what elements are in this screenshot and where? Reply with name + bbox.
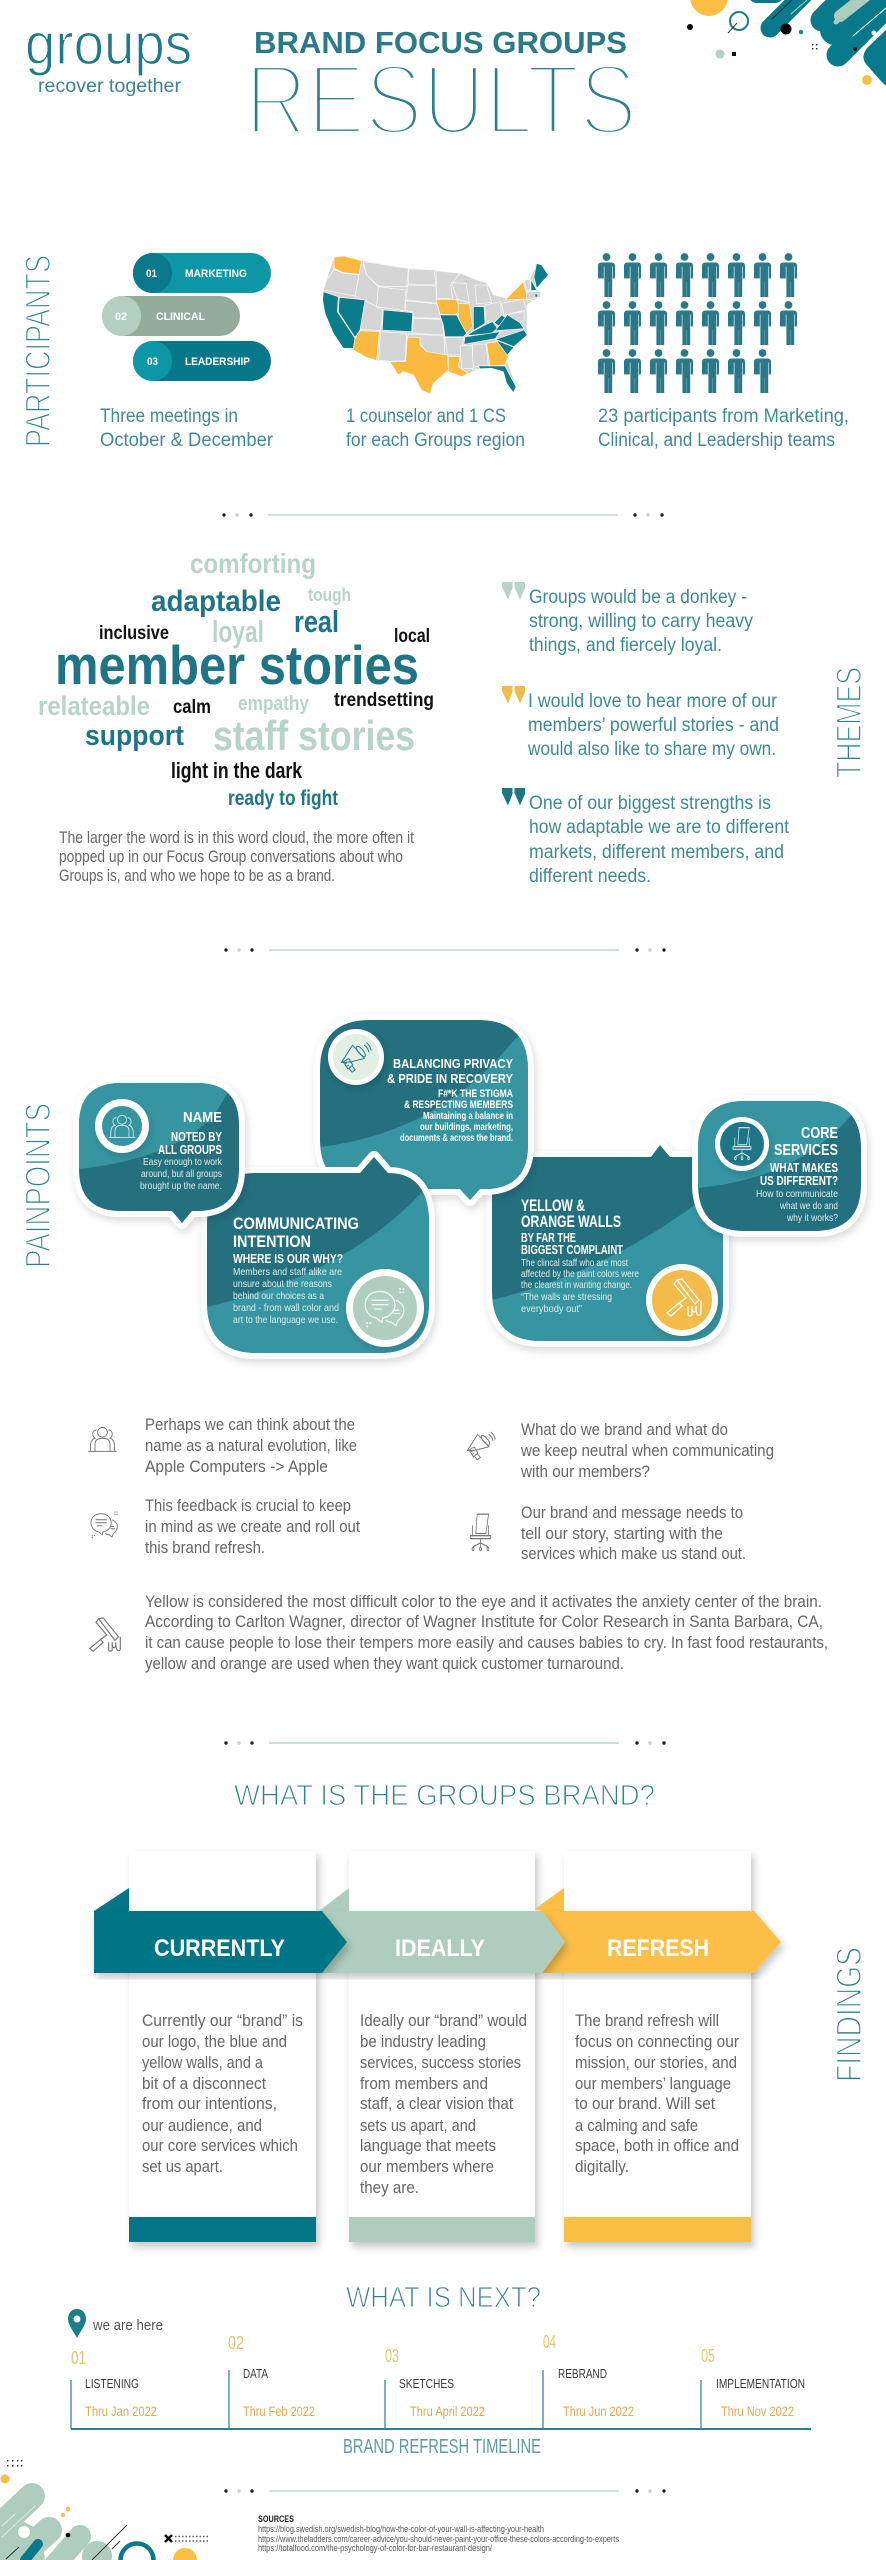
bubble: balancing privacy bbox=[310, 1020, 540, 1210]
bubble: yellow and orange walls: BIGGEST COMPLAINT bbox=[521, 1242, 623, 1257]
step 03: SKETCHES bbox=[399, 2376, 454, 2391]
card: ideally: Ideally our “brand” would bbox=[360, 2012, 527, 2030]
arrow: ideally: IDEALLY bbox=[395, 1935, 485, 1962]
bubble: yellow and orange walls: the clearest in wanting change. bbox=[521, 1279, 632, 1291]
bubble: core services bbox=[690, 1090, 870, 1231]
bubble: core services: why it works? bbox=[786, 1212, 838, 1224]
word cloud: comforting bbox=[190, 548, 316, 579]
text: three meetings bbox=[100, 406, 274, 451]
icon: chat badge bbox=[346, 1269, 424, 1347]
icon: megaphone badge bbox=[328, 1029, 384, 1085]
bubble: communicating intention: behind our choices as a bbox=[233, 1290, 324, 1302]
bubble: communicating intention: WHERE IS OUR WHY? bbox=[233, 1251, 343, 1266]
text: brand refresh timeline: BRAND REFRESH TIMELINE bbox=[343, 2436, 541, 2458]
step 03 bbox=[385, 2346, 485, 2419]
text: word cloud note bbox=[59, 828, 414, 885]
bubble: yellow and orange walls: BY FAR THE bbox=[521, 1230, 576, 1245]
word cloud: staff stories bbox=[213, 712, 415, 759]
card: refresh: The brand refresh will bbox=[575, 2012, 719, 2030]
pill: leadership bbox=[133, 341, 271, 381]
pill: leadership: 03 bbox=[147, 356, 158, 368]
icon: location pin and we are here: we are here bbox=[92, 2317, 163, 2334]
section label: participants: PARTICIPANTS bbox=[19, 255, 58, 447]
quote 3: how adaptable we are to different bbox=[529, 817, 790, 838]
bubble: communicating intention: Members and staff alike are bbox=[233, 1266, 342, 1278]
step 04: Thru Jun 2022 bbox=[563, 2403, 634, 2419]
card: ideally: sets us apart, and bbox=[360, 2117, 476, 2135]
note: yellow color research: yellow and orange are used when they want quick customer turnaround. bbox=[145, 1654, 624, 1673]
word cloud: inclusive bbox=[99, 623, 169, 644]
step 04 bbox=[543, 2332, 634, 2419]
pill: marketing: MARKETING bbox=[185, 268, 247, 280]
bubble: communicating intention: COMMUNICATING bbox=[233, 1214, 359, 1233]
step 05 bbox=[701, 2346, 805, 2419]
note: feedback bbox=[91, 1496, 360, 1557]
text: word cloud note: popped up in our Focus Group conversations about who bbox=[59, 847, 403, 866]
step 05: IMPLEMENTATION bbox=[716, 2376, 805, 2391]
bubble: balancing privacy: & PRIDE IN RECOVERY bbox=[387, 1071, 513, 1086]
text: 23 participants: 23 participants from Marketing, bbox=[598, 406, 849, 427]
card: currently: Currently our “brand” is bbox=[142, 2012, 303, 2030]
icon: chair badge bbox=[715, 1117, 769, 1171]
pill: leadership: LEADERSHIP bbox=[185, 356, 250, 368]
word cloud: local bbox=[394, 626, 430, 647]
bubble: core services: WHAT MAKES bbox=[770, 1160, 838, 1175]
text: counselor and cs bbox=[346, 406, 525, 451]
bubble: yellow and orange walls: ORANGE WALLS bbox=[521, 1212, 621, 1231]
pill: marketing: 01 bbox=[146, 268, 157, 280]
word cloud: calm bbox=[173, 697, 211, 718]
card: currently: from our intentions, bbox=[142, 2095, 277, 2113]
quote 2: members’ powerful stories - and bbox=[528, 715, 779, 736]
bubble: yellow and orange walls: everybody out” bbox=[521, 1303, 582, 1315]
card: ideally: language that meets bbox=[360, 2137, 496, 2155]
word cloud: light in the dark bbox=[171, 758, 303, 783]
decoration: top right shapes bbox=[687, 0, 886, 86]
text: word cloud note: Groups is, and who we hope to be as a brand. bbox=[59, 866, 335, 885]
bubble: name: NAME bbox=[183, 1109, 222, 1126]
divider 3 bbox=[224, 1741, 666, 1745]
icon array: 23 participants bbox=[598, 253, 797, 393]
sources: https://blog.swedish.org/swedish-blog/how-the-color-of-your-wall-is-affecting-your-health bbox=[258, 2524, 544, 2534]
note: name evolution: Perhaps we can think about the bbox=[145, 1415, 355, 1434]
note: what do we brand: we keep neutral when communicating bbox=[520, 1441, 774, 1460]
text: 23 participants bbox=[598, 406, 849, 451]
bubble: name: NOTED BY bbox=[171, 1130, 223, 1144]
section label: findings: FINDINGS bbox=[830, 1947, 869, 2082]
step 04: REBRAND bbox=[558, 2366, 607, 2381]
card: refresh bbox=[564, 1851, 751, 2242]
arrow: ideally bbox=[319, 1888, 565, 1973]
word cloud: tough bbox=[308, 585, 351, 605]
divider 4 bbox=[224, 2489, 666, 2493]
bubble: balancing privacy: & RESPECTING MEMBERS bbox=[404, 1099, 513, 1111]
card: refresh: digitally. bbox=[575, 2158, 629, 2176]
note: feedback: This feedback is crucial to keep bbox=[145, 1496, 351, 1515]
bubble: yellow and orange walls: “The walls are stressing bbox=[521, 1291, 612, 1303]
card: ideally: from members and bbox=[360, 2075, 488, 2093]
step 02: Thru Feb 2022 bbox=[243, 2403, 315, 2419]
card: currently: our core services which bbox=[142, 2137, 298, 2155]
quote 3: One of our biggest strengths is bbox=[529, 793, 771, 814]
text: counselor and cs: 1 counselor and 1 CS bbox=[346, 406, 506, 427]
step 05: Thru Nov 2022 bbox=[721, 2403, 794, 2419]
note: tell our story: services which make us stand out. bbox=[521, 1544, 746, 1563]
word cloud: empathy bbox=[238, 693, 310, 715]
bubble: communicating intention: INTENTION bbox=[233, 1232, 311, 1251]
bubble: name: around, but all groups bbox=[141, 1168, 222, 1180]
card: currently: yellow walls, and a bbox=[142, 2054, 264, 2072]
bubble: core services: what we do and bbox=[779, 1200, 838, 1212]
card: ideally: be industry leading bbox=[360, 2033, 486, 2051]
note: what do we brand bbox=[467, 1420, 774, 1481]
note: name evolution: Apple Computers -> Apple bbox=[145, 1457, 328, 1476]
sources: https://totalfood.com/the-psychology-of-color-for-bar-restaurant-design/ bbox=[258, 2543, 492, 2553]
step 03: 03 bbox=[385, 2346, 399, 2366]
section label: themes: THEMES bbox=[830, 667, 869, 778]
card: currently: bit of a disconnect bbox=[142, 2075, 266, 2093]
card: refresh: a calming and safe bbox=[575, 2117, 698, 2135]
pill: clinical: CLINICAL bbox=[156, 311, 205, 323]
word cloud: support bbox=[85, 720, 184, 752]
sources bbox=[258, 2514, 619, 2553]
quote 3 bbox=[502, 788, 790, 887]
card: ideally: they are. bbox=[360, 2179, 419, 2197]
card: currently: our audience, and bbox=[142, 2117, 262, 2135]
arrow: refresh: REFRESH bbox=[607, 1935, 709, 1962]
quote 2 bbox=[502, 686, 779, 760]
step 02: 02 bbox=[228, 2333, 244, 2353]
text: word cloud note: The larger the word is in this word cloud, the more often it bbox=[59, 828, 414, 847]
card: ideally: staff, a clear vision that bbox=[360, 2095, 513, 2113]
section label: painpoints: PAINPOINTS bbox=[19, 1103, 58, 1268]
bubble: core services: CORE bbox=[801, 1125, 838, 1142]
title: BRAND FOCUS GROUPS bbox=[254, 25, 627, 60]
card: refresh: to our brand. Will set bbox=[575, 2095, 715, 2113]
logo: groups recover together: recover together bbox=[38, 76, 182, 97]
icon: location pin and we are here bbox=[68, 2309, 163, 2338]
word cloud: trendsetting bbox=[334, 690, 434, 711]
step 05: 05 bbox=[701, 2346, 715, 2366]
note: feedback: this brand refresh. bbox=[145, 1538, 265, 1557]
sources: SOURCES bbox=[258, 2514, 294, 2525]
arrow: currently: CURRENTLY bbox=[154, 1935, 285, 1962]
icon: paint roller badge bbox=[646, 1264, 718, 1336]
word cloud: ready to fight bbox=[228, 787, 338, 810]
word cloud: relateable bbox=[38, 691, 150, 721]
note: tell our story: tell our story, starting with the bbox=[521, 1524, 723, 1543]
step 01: LISTENING bbox=[85, 2376, 139, 2391]
card: refresh: mission, our stories, and bbox=[575, 2054, 737, 2072]
decoration: bottom left shapes bbox=[0, 2460, 208, 2560]
icon: group badge bbox=[95, 1099, 149, 1153]
note: tell our story: Our brand and message needs to bbox=[521, 1503, 743, 1522]
bubble: communicating intention bbox=[200, 1157, 440, 1360]
pill: clinical: 02 bbox=[115, 311, 127, 323]
card: refresh: focus on connecting our bbox=[575, 2033, 739, 2051]
bubble: balancing privacy: our buildings, marketing, bbox=[420, 1122, 513, 1133]
bubble: balancing privacy: BALANCING PRIVACY bbox=[393, 1056, 513, 1071]
bubble: core services: SERVICES bbox=[774, 1142, 838, 1159]
bubble: balancing privacy: Maintaining a balance in bbox=[423, 1111, 513, 1122]
note: name evolution bbox=[88, 1415, 357, 1476]
note: what do we brand: What do we brand and what do bbox=[521, 1420, 728, 1439]
quote 3: different needs. bbox=[529, 866, 651, 887]
quote 2: I would love to hear more of our bbox=[528, 691, 778, 712]
title: RESULTS bbox=[245, 44, 637, 156]
text: 23 participants: Clinical, and Leadership teams bbox=[598, 430, 835, 451]
bubble: yellow and orange walls: The clincal staff who are most bbox=[521, 1257, 628, 1269]
quote 2: would also like to share my own. bbox=[527, 739, 776, 760]
bubble: communicating intention: unsure about the reasons bbox=[233, 1278, 332, 1290]
text: three meetings: October & December bbox=[100, 430, 274, 451]
divider 2 bbox=[224, 948, 666, 952]
step 03: Thru April 2022 bbox=[410, 2403, 485, 2419]
text: counselor and cs: for each Groups region bbox=[346, 430, 525, 451]
bubble: communicating intention: brand - from wall color and bbox=[233, 1302, 339, 1314]
note: feedback: in mind as we create and roll out bbox=[145, 1517, 360, 1536]
bubble: name: brought up the name. bbox=[140, 1180, 222, 1192]
note: tell our story bbox=[470, 1503, 746, 1563]
pill: marketing bbox=[133, 253, 271, 293]
quote 1: strong, willing to carry heavy bbox=[529, 611, 753, 632]
word cloud bbox=[38, 548, 434, 810]
note: name evolution: name as a natural evolution, like bbox=[145, 1436, 357, 1455]
card: refresh: our members’ language bbox=[575, 2075, 731, 2093]
sources: https://www.theladders.com/career-advice/you-should-never-paint-your-office-these-colors-according-to-experts bbox=[258, 2534, 619, 2544]
card: ideally bbox=[349, 1851, 535, 2242]
step 01: Thru Jan 2022 bbox=[85, 2403, 157, 2419]
bubble: yellow and orange walls: YELLOW & bbox=[521, 1196, 585, 1215]
card: currently: our logo, the blue and bbox=[142, 2033, 287, 2051]
quote 1 bbox=[502, 582, 753, 656]
bubble: communicating intention: art to the language we use. bbox=[233, 1314, 338, 1326]
arrow: refresh bbox=[535, 1888, 781, 1973]
note: yellow color research: Yellow is considered the most difficult color to the eye and it activates the anxiety center of the brain. bbox=[145, 1592, 822, 1611]
word cloud: real bbox=[294, 604, 339, 639]
card: currently bbox=[129, 1851, 316, 2242]
word cloud: loyal bbox=[212, 614, 264, 649]
pills: meeting groups bbox=[102, 253, 271, 381]
bubble: yellow and orange walls: affected by the paint colors were bbox=[521, 1268, 639, 1280]
step 01: 01 bbox=[71, 2348, 86, 2368]
note: yellow color research: According to Carlton Wagner, director of Wagner Institute for Color Research in Santa Barbara, CA, bbox=[145, 1612, 823, 1631]
step 01 bbox=[71, 2348, 157, 2419]
note: what do we brand: with our members? bbox=[520, 1462, 650, 1481]
step 04: 04 bbox=[543, 2332, 556, 2352]
bubble: balancing privacy: F#*K THE STIGMA bbox=[438, 1088, 513, 1100]
pill: clinical bbox=[102, 296, 240, 336]
chart: map of US regions bbox=[323, 256, 548, 394]
card: currently: set us apart. bbox=[142, 2158, 223, 2176]
word cloud: adaptable bbox=[151, 585, 281, 618]
card: ideally: our members where bbox=[360, 2158, 494, 2176]
card: refresh: space, both in office and bbox=[575, 2137, 739, 2155]
bubble: name: Easy enough to work bbox=[143, 1156, 223, 1168]
heading: what is next: WHAT IS NEXT? bbox=[346, 2282, 541, 2314]
heading: what is the groups brand: WHAT IS THE GROUPS BRAND? bbox=[234, 1780, 655, 1812]
bubble: balancing privacy: documents & across the brand. bbox=[400, 1133, 513, 1144]
text: three meetings: Three meetings in bbox=[100, 406, 238, 427]
step 02: DATA bbox=[243, 2366, 268, 2381]
bubble: name: ALL GROUPS bbox=[158, 1143, 222, 1157]
word cloud: member stories bbox=[55, 634, 419, 696]
logo: groups recover together: groups bbox=[25, 12, 192, 77]
arrow: currently bbox=[94, 1888, 347, 1973]
quote 3: markets, different members, and bbox=[529, 842, 784, 863]
step 02 bbox=[228, 2333, 315, 2419]
quote 1: things, and fiercely loyal. bbox=[529, 635, 722, 656]
quote 1: Groups would be a donkey - bbox=[529, 587, 747, 608]
bubble: core services: How to communicate bbox=[756, 1188, 838, 1200]
note: yellow color research bbox=[90, 1592, 828, 1673]
bubble: core services: US DIFFERENT? bbox=[760, 1173, 838, 1188]
card: ideally: services, success stories bbox=[360, 2054, 521, 2072]
timeline: brand refresh bbox=[71, 2332, 811, 2429]
divider 1 bbox=[222, 513, 664, 517]
bubble: yellow and orange walls bbox=[485, 1145, 730, 1350]
bubble: name bbox=[70, 1070, 250, 1223]
